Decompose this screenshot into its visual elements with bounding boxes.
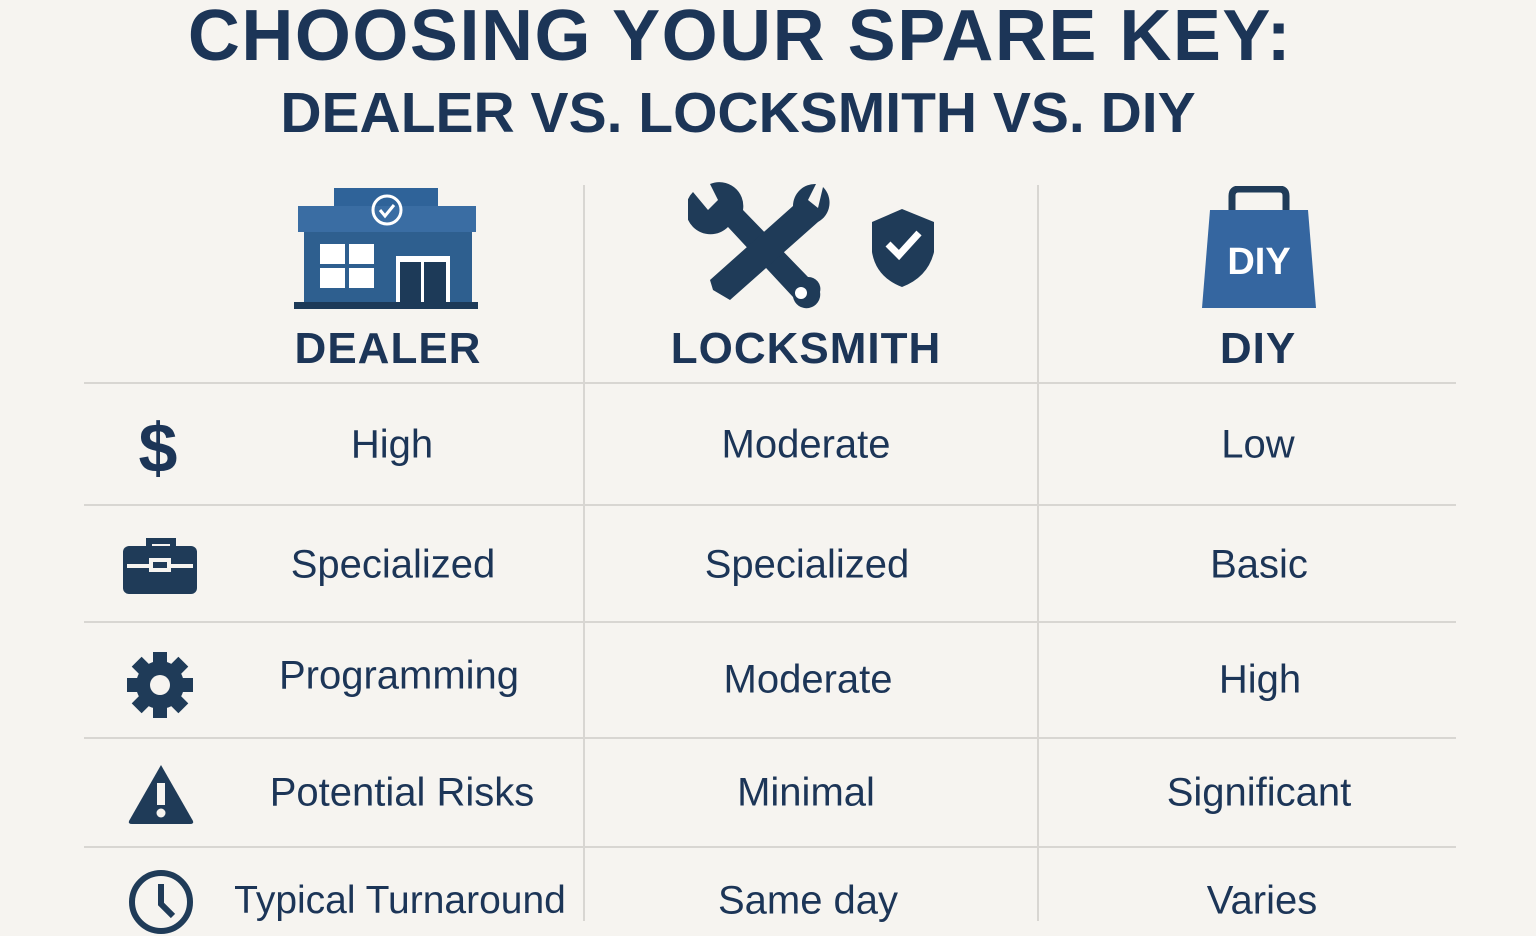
row: risks: Minimal (737, 770, 875, 814)
icon: DIY bag (1202, 186, 1316, 308)
heading: columns: LOCKSMITH (671, 324, 941, 373)
title: DEALER VS. LOCKSMITH VS. DIY (280, 81, 1196, 145)
title (188, 0, 1292, 145)
row: turnaround: Same day (718, 878, 898, 922)
row: programming: High (1219, 658, 1301, 702)
row: tools: Basic (1210, 542, 1308, 586)
row: cost: Low (1221, 422, 1295, 466)
row: risks: Significant (1167, 770, 1351, 814)
icon: locksmith tools (688, 182, 934, 308)
row: programming (127, 652, 1301, 718)
heading: columns (295, 324, 1296, 373)
row: cost: High (351, 422, 433, 466)
row: tools: Specialized (291, 542, 495, 586)
row: programming: Moderate (724, 658, 892, 702)
row: cost: Moderate (722, 422, 890, 466)
row: cost (139, 409, 1295, 487)
heading: columns: DIY (1220, 324, 1296, 373)
row: programming: Programming (279, 654, 519, 698)
row: risks (128, 765, 1351, 824)
icon: dollar: $ (139, 409, 177, 487)
icon: dealer building (294, 188, 478, 309)
icon: clock (129, 870, 193, 934)
row: turnaround: Typical Turnaround (234, 879, 566, 922)
icon: toolbox (123, 538, 197, 594)
icon: gear (127, 652, 193, 718)
row: tools: Specialized (705, 542, 909, 586)
row: tools (123, 538, 1308, 594)
row: turnaround (129, 870, 1317, 934)
row: risks: Potential Risks (270, 770, 534, 814)
row: turnaround: Varies (1207, 878, 1317, 922)
icon: warning (128, 765, 194, 824)
heading: columns: DEALER (295, 324, 481, 373)
icon: DIY bag: DIY (1227, 241, 1291, 283)
